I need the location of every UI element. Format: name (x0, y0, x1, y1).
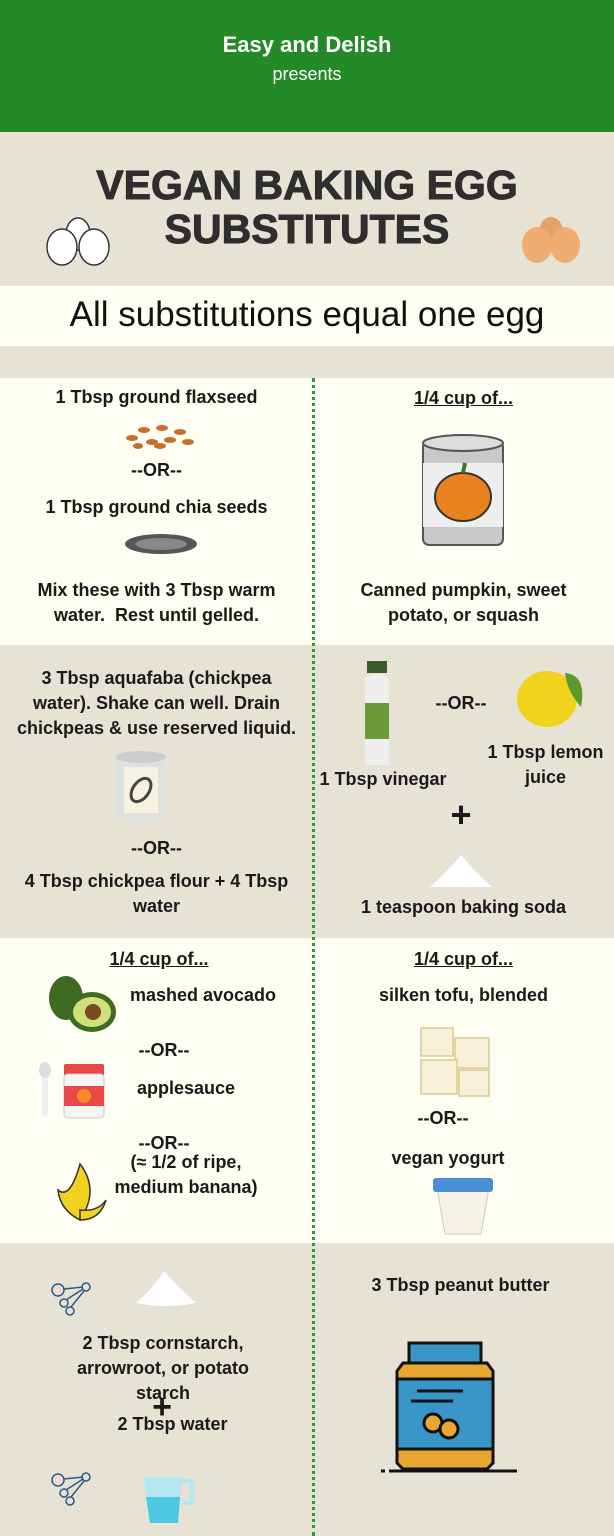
text: canned: Canned pumpkin, sweet (360, 580, 567, 600)
icon: applesauce (39, 1062, 104, 1118)
text: banana: medium banana) (114, 1177, 258, 1197)
text: lemon juice: juice (525, 767, 566, 787)
header (0, 0, 614, 132)
icon: brown eggs (522, 217, 580, 263)
icon: tofu (420, 1027, 490, 1097)
text: cornstarch (77, 1333, 249, 1403)
text: chickpea flour (25, 871, 288, 916)
icon: measuring spoons (51, 1282, 91, 1316)
text: or: --OR-- (418, 1108, 468, 1128)
icon: baking soda (430, 855, 492, 887)
header: Easy and Delish (223, 32, 391, 57)
text: water: 2 Tbsp water (117, 1414, 228, 1434)
icon: vinegar bottle (365, 661, 389, 765)
divider (312, 378, 315, 1536)
panel: tofu/yogurt (379, 949, 548, 1234)
text: aquafaba: water). Shake can well. Drain (33, 693, 280, 713)
text: chia: 1 Tbsp ground chia seeds (45, 497, 268, 517)
icon: chickpea can (116, 751, 166, 821)
text: cornstarch: arrowroot, or potato (77, 1358, 249, 1378)
text: banana (114, 1152, 258, 1197)
text: aquafaba: 3 Tbsp aquafaba (chickpea (41, 668, 272, 688)
subtitle band: All substitutions equal one egg (70, 295, 544, 334)
text: peanut butter: 3 Tbsp peanut butter (371, 1275, 550, 1295)
icon: avocado (49, 976, 116, 1032)
text: flaxseed: 1 Tbsp ground flaxseed (55, 387, 258, 407)
icon: water jug (144, 1477, 194, 1523)
text: chickpea flour: water (133, 896, 180, 916)
icon: chia (125, 534, 197, 554)
text: mix: water. Rest until gelled. (54, 605, 259, 625)
icon: peanut butter jar (381, 1342, 517, 1472)
icon: starch pile (136, 1271, 196, 1306)
text: applesauce: applesauce (137, 1078, 235, 1098)
icon: yogurt cup (433, 1178, 493, 1234)
text: lemon juice (487, 742, 604, 787)
text: or: --OR-- (436, 693, 486, 713)
text: mix (37, 580, 276, 625)
panel: pumpkin (360, 388, 567, 625)
text: cornstarch: starch (136, 1383, 190, 1403)
text: or: --OR-- (131, 460, 182, 480)
heading: 1/4 cup of... (414, 949, 513, 969)
text: canned: potato, or squash (388, 605, 539, 625)
icon: lemon (517, 671, 582, 727)
panel: flax/chia (37, 387, 276, 625)
text: yogurt: vegan yogurt (391, 1148, 505, 1168)
text: mix: Mix these with 3 Tbsp warm (37, 580, 276, 600)
text: lemon juice: 1 Tbsp lemon (487, 742, 604, 762)
icon: flaxseed (126, 425, 194, 449)
text: cornstarch: 2 Tbsp cornstarch, (82, 1333, 244, 1353)
panel: aquafaba (17, 668, 296, 916)
text: tofu: silken tofu, blended (379, 985, 548, 1005)
text: or: --OR-- (138, 1133, 189, 1153)
title: SUBSTITUTES (165, 206, 449, 252)
text: avocado: mashed avocado (130, 985, 276, 1005)
icon: measuring spoons (51, 1472, 91, 1506)
text: canned (360, 580, 567, 625)
text: aquafaba (17, 668, 296, 738)
plus: + (152, 1388, 172, 1426)
text: aquafaba: chickpeas & use reserved liquid. (17, 718, 296, 738)
title (96, 162, 518, 252)
icon: pumpkin can (422, 434, 504, 546)
panel: peanut butter (371, 1275, 550, 1472)
subtitle band (0, 286, 614, 346)
text: or: --OR-- (138, 1040, 189, 1060)
row backgrounds (0, 378, 614, 645)
heading: 1/4 cup of... (109, 949, 209, 969)
icon: white eggs (46, 217, 110, 266)
text: chickpea flour: 4 Tbsp chickpea flour + 4 Tbsp (25, 871, 288, 891)
text: or: --OR-- (131, 838, 182, 858)
header: presents (272, 64, 342, 84)
text: banana: (≈ 1/2 of ripe, (131, 1152, 241, 1172)
panel: cornstarch (51, 1271, 249, 1523)
text: vinegar: 1 Tbsp vinegar (319, 769, 447, 789)
panel: avocado/applesauce/banana (39, 949, 276, 1221)
heading: 1/4 cup of... (414, 388, 513, 408)
plus: + (450, 794, 472, 835)
title: VEGAN BAKING EGG (96, 162, 518, 208)
text: baking soda: 1 teaspoon baking soda (361, 897, 566, 917)
icon: banana (57, 1162, 107, 1221)
panel: vinegar/lemon (319, 661, 604, 917)
